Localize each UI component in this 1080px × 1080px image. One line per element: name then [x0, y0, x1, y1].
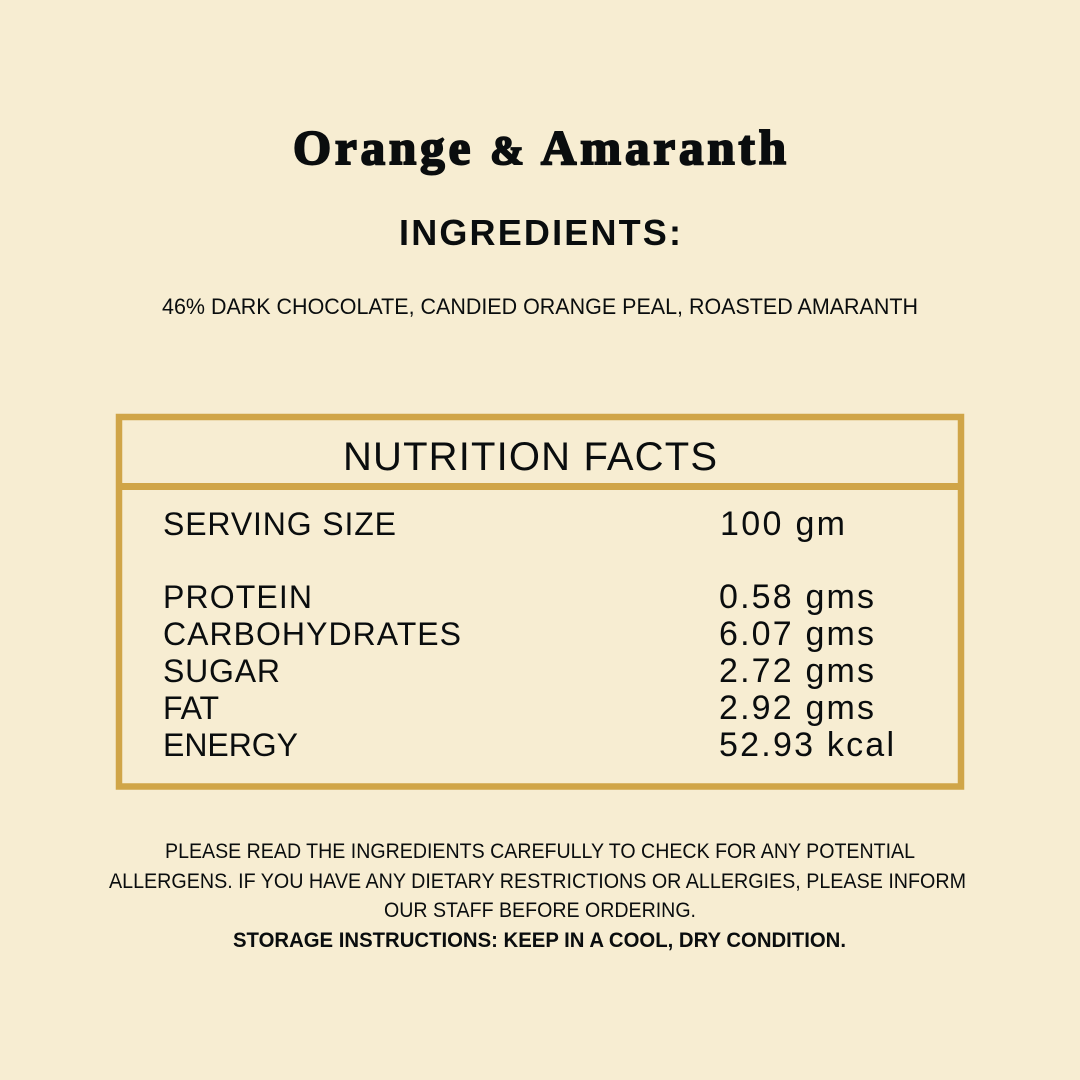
storage instructions: STORAGE INSTRUCTIONS: KEEP IN A COOL, DRY CONDITION.	[233, 929, 846, 952]
ingredients list: 46% DARK CHOCOLATE, CANDIED ORANGE PEAL, ROASTED AMARANTH	[162, 294, 918, 319]
header divider	[119, 483, 961, 490]
allergen notice: PLEASE READ THE INGREDIENTS CAREFULLY TO CHECK FOR ANY POTENTIAL	[165, 840, 915, 863]
row: energy: ENERGY	[163, 727, 298, 763]
row: protein	[163, 578, 874, 616]
title: Orange & Amaranth	[293, 120, 786, 175]
row: fat	[163, 689, 874, 727]
nutrition facts heading: NUTRITION FACTS	[343, 435, 717, 479]
allergen notice	[109, 840, 966, 922]
row: sugar: SUGAR	[163, 653, 280, 689]
row: sugar: 2.72 gms	[719, 652, 874, 690]
allergen notice: OUR STAFF BEFORE ORDERING.	[384, 899, 696, 922]
row: energy	[163, 726, 894, 764]
row: fat: 2.92 gms	[719, 689, 874, 727]
row: carbohydrates: 6.07 gms	[719, 615, 874, 653]
panel: nutrition facts	[119, 417, 961, 786]
row: carbohydrates	[163, 615, 874, 653]
ingredients heading: INGREDIENTS:	[399, 212, 681, 253]
panel border	[119, 417, 961, 786]
row: protein: PROTEIN	[163, 579, 312, 615]
allergen notice: ALLERGENS. IF YOU HAVE ANY DIETARY RESTRICTIONS OR ALLERGIES, PLEASE INFORM	[109, 870, 966, 893]
row: carbohydrates: CARBOHYDRATES	[163, 616, 461, 652]
row: fat: FAT	[163, 690, 219, 726]
row: protein: 0.58 gms	[719, 578, 874, 616]
row: serving size	[163, 505, 845, 543]
row: serving size: 100 gm	[720, 505, 845, 543]
row: sugar	[163, 652, 874, 690]
row: energy: 52.93 kcal	[719, 726, 894, 764]
row: serving size: SERVING SIZE	[163, 506, 396, 542]
